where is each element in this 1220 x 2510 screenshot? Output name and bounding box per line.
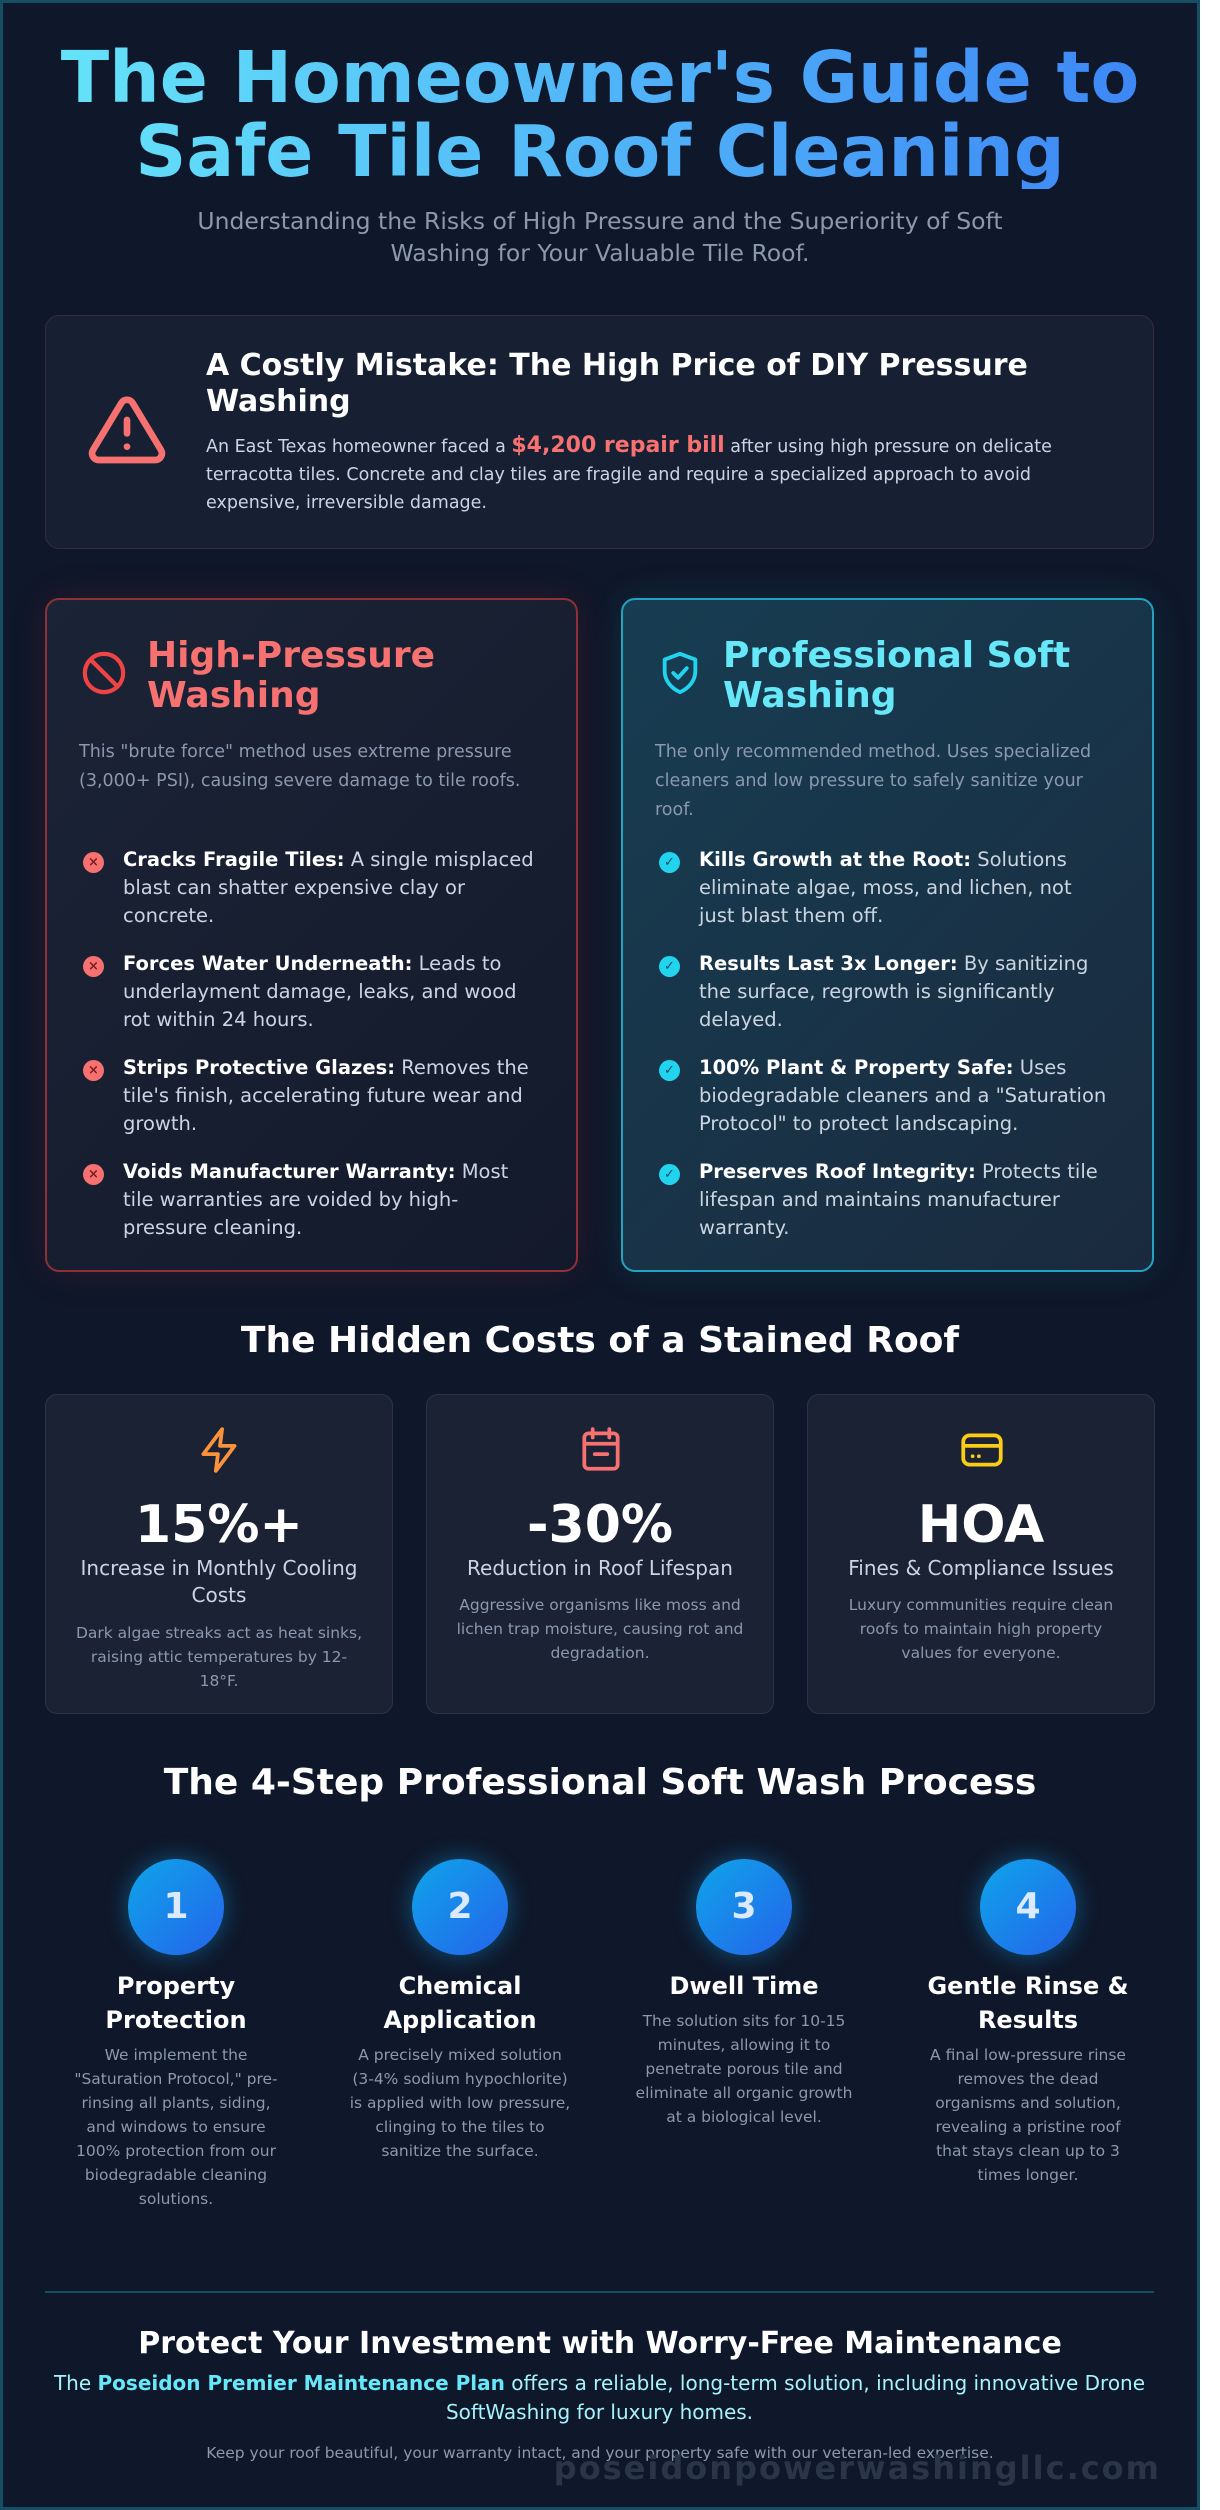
list: soft washing benefits: ✓: [664, 1167, 675, 1182]
list: high-pressure risks: ×: [88, 855, 99, 870]
icon: lightning: [201, 1427, 237, 1473]
step 3: [636, 1846, 852, 2126]
icon: card: [961, 1434, 1003, 1466]
panel: professional soft washing: [621, 598, 1154, 1272]
step 2: 2: [447, 1886, 473, 1927]
card: cooling costs: [45, 1394, 393, 1714]
step 2: Chemical Application: [383, 1972, 537, 2034]
label: lifespan: Reduction in Roof Lifespan: [467, 1556, 733, 1580]
heading: costly mistake: A Costly Mistake: The High Price of DIY Pressure Washing: [206, 348, 1028, 419]
text: soft washing description: The only recommended method. Uses specialized cleaners and low pressure to safely sanitize your roof.: [655, 742, 1091, 820]
stat: 15%+: 15%+: [135, 1495, 303, 1555]
list: high-pressure risks: Forces Water Underneath: Leads to underlayment damage, leaks, and wood rot within 24 hours.: [123, 952, 517, 1031]
subtitle: Understanding the Risks of High Pressure and the Superiority of Soft Washing for Your Valuable Tile Roof.: [197, 207, 1003, 267]
step 1: We implement the "Saturation Protocol," pre-rinsing all plants, siding, and windows to ensure 100% protection from our biodegradable cleaning solutions.: [74, 2046, 278, 2208]
text: tagline: Keep your roof beautiful, your warranty intact, and your property safe with our veteran-led expertise.: [206, 2444, 994, 2462]
step 1: [74, 1846, 278, 2208]
label: HOA: Fines & Compliance Issues: [848, 1556, 1114, 1580]
list: high-pressure risks: Cracks Fragile Tiles: A single misplaced blast can shatter expensive clay or concrete.: [123, 848, 534, 927]
list: high-pressure risks: ×: [88, 1167, 99, 1182]
text: lifespan detail: Aggressive organisms like moss and lichen trap moisture, causing rot and degradation.: [457, 1596, 743, 1662]
step 1: Property Protection: [105, 1972, 247, 2034]
heading: soft washing: Professional Soft: [723, 635, 1070, 676]
step 4: 4: [1015, 1886, 1041, 1927]
text: costly mistake body: An East Texas homeowner faced a $4,200 repair bill after using high pressure on delicate terracotta tiles. Concrete and clay tiles are fragile and require a specialized approach to avoid expensive, irreversible damage.: [206, 433, 1052, 513]
list: soft washing benefits: Results Last 3x Longer: By sanitizing the surface, regrowth is significantly delayed.: [699, 952, 1088, 1031]
step 4: [927, 1846, 1129, 2184]
icon: prohibited: [82, 652, 126, 694]
step 1: 1: [163, 1886, 189, 1927]
step 3: Dwell Time: [669, 1972, 819, 2000]
heading: maintenance: Protect Your Investment with Worry-Free Maintenance: [138, 2326, 1062, 2361]
heading: 4-step process: The 4-Step Professional Soft Wash Process: [164, 1762, 1036, 1803]
stat: -30%: -30%: [527, 1495, 673, 1555]
icon: calendar: [582, 1427, 620, 1471]
icon: shield check: [662, 652, 698, 694]
watermark: poseidonpowerwashingllc.com: [554, 2449, 1161, 2487]
step 3: 3: [731, 1886, 757, 1927]
text: HOA detail: Luxury communities require clean roofs to maintain high property values for everyone.: [849, 1596, 1113, 1662]
step 2: A precisely mixed solution (3-4% sodium hypochlorite) is applied with low pressure, clinging to the tiles to sanitize the surface.: [350, 2046, 570, 2160]
heading: soft washing: [723, 635, 1070, 716]
text: high-pressure description: This "brute force" method uses extreme pressure (3,000+ PSI), causing severe damage to tile roofs.: [79, 742, 520, 791]
text: cooling detail: Dark algae streaks act as heat sinks, raising attic temperatures by 12-18°F.: [76, 1624, 362, 1690]
step 4: A final low-pressure rinse removes the dead organisms and solution, revealing a pristine roof that stays clean up to 3 times longer.: [930, 2046, 1126, 2184]
list: soft washing benefits: ✓: [664, 1063, 675, 1078]
card: roof lifespan: [426, 1394, 774, 1714]
step 4: Gentle Rinse & Results: [927, 1972, 1129, 2034]
heading: hidden costs: The Hidden Costs of a Stained Roof: [241, 1320, 959, 1361]
list: soft washing benefits: [659, 848, 1106, 1239]
title: Safe Tile Roof Cleaning: [135, 110, 1065, 193]
heading: high-pressure: High-Pressure: [147, 635, 435, 676]
panel: high-pressure washing: [45, 598, 578, 1272]
icon: warning triangle: [88, 396, 166, 464]
list: high-pressure risks: Strips Protective Glazes: Removes the tile's finish, accelerating future wear and growth.: [123, 1056, 529, 1135]
heading: high-pressure: Washing: [147, 675, 321, 716]
title: The Homeowner's Guide to: [61, 36, 1139, 119]
stat: HOA: HOA: [918, 1495, 1044, 1555]
list: soft washing benefits: 100% Plant & Property Safe: Uses biodegradable cleaners and a "Saturation Protocol" to protect landscaping.: [699, 1056, 1106, 1135]
callout: costly mistake: [45, 315, 1154, 549]
step 3: The solution sits for 10-15 minutes, allowing it to penetrate porous tile and eliminate all organic growth at a biological level.: [636, 2012, 852, 2126]
heading: high-pressure: [147, 635, 435, 716]
heading: soft washing: Washing: [723, 675, 897, 716]
card: HOA: [807, 1394, 1155, 1714]
list: high-pressure risks: ×: [88, 959, 99, 974]
list: soft washing benefits: ✓: [664, 855, 675, 870]
list: soft washing benefits: Kills Growth at the Root: Solutions eliminate algae, moss, and lichen, not just blast them off.: [699, 848, 1072, 927]
title: [3, 41, 1197, 189]
list: high-pressure risks: Voids Manufacturer Warranty: Most tile warranties are voided by high-pressure cleaning.: [123, 1160, 508, 1239]
list: soft washing benefits: ✓: [664, 959, 675, 974]
list: high-pressure risks: ×: [88, 1063, 99, 1078]
label: cooling: Increase in Monthly Cooling Costs: [81, 1556, 357, 1607]
list: high-pressure risks: [83, 848, 534, 1239]
list: soft washing benefits: Preserves Roof Integrity: Protects tile lifespan and maintains manufacturer warranty.: [699, 1160, 1098, 1239]
step 2: [350, 1846, 570, 2160]
text: maintenance plan: The Poseidon Premier Maintenance Plan offers a reliable, long-term solution, including innovative Drone SoftWashing for luxury homes.: [54, 2371, 1145, 2424]
